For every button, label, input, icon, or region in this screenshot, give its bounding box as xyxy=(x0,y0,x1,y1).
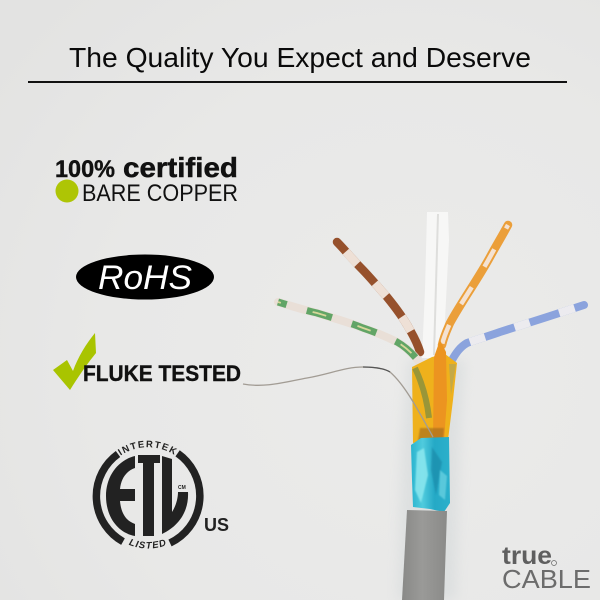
text: INTERTEK xyxy=(112,447,184,463)
icon: green dot xyxy=(56,180,78,202)
wordmark: true: true xyxy=(502,542,552,570)
drain wire xyxy=(243,367,433,437)
label: fluke tested: FLUKE TESTED xyxy=(83,361,241,386)
badge: Fluke tested xyxy=(53,333,241,390)
soft shadow on wall xyxy=(398,360,465,600)
RoHS text: RoHS xyxy=(98,259,192,297)
heading: certified: certified xyxy=(123,152,238,183)
yellow mylar wrap xyxy=(412,340,457,443)
orange twisted pair xyxy=(442,225,508,345)
badge: RoHS xyxy=(76,254,214,300)
letter V xyxy=(162,456,188,534)
letter E xyxy=(106,456,135,536)
badge: 100% certified bare copper xyxy=(55,152,238,207)
heading: 100%: 100% xyxy=(55,156,115,183)
gray outer jacket xyxy=(402,510,447,600)
blue foil shield xyxy=(411,437,450,512)
logo: ETL Intertek listed xyxy=(92,440,229,549)
title: The Quality You Expect and Deserve xyxy=(69,42,531,73)
icon: green check mark xyxy=(53,333,96,390)
title underline xyxy=(28,81,567,83)
wordmark: CABLE: CABLE xyxy=(502,566,591,594)
dark base of wrap xyxy=(418,428,444,441)
black ellipse xyxy=(76,254,214,300)
green twisted pair xyxy=(278,302,420,363)
registered mark xyxy=(552,560,556,566)
cable photograph xyxy=(243,212,584,600)
logo: ETL Intertek listed: LISTED xyxy=(128,539,166,549)
text: US: US xyxy=(204,515,229,535)
brown twisted pair xyxy=(337,242,420,352)
label: bare copper: BARE COPPER xyxy=(82,180,238,207)
green strands behind wrap xyxy=(415,368,429,418)
letter T xyxy=(138,455,160,536)
logo: trueCABLE xyxy=(502,542,591,594)
white filler strand xyxy=(422,212,449,358)
logo: ETL Intertek listed: INTERTEK xyxy=(118,440,178,456)
blue twisted pair xyxy=(452,305,584,360)
orange strands behind wrap xyxy=(433,340,447,440)
text: CM mark: CM xyxy=(178,485,186,491)
outer ring arcs xyxy=(96,453,200,543)
text: LISTED xyxy=(110,532,186,549)
